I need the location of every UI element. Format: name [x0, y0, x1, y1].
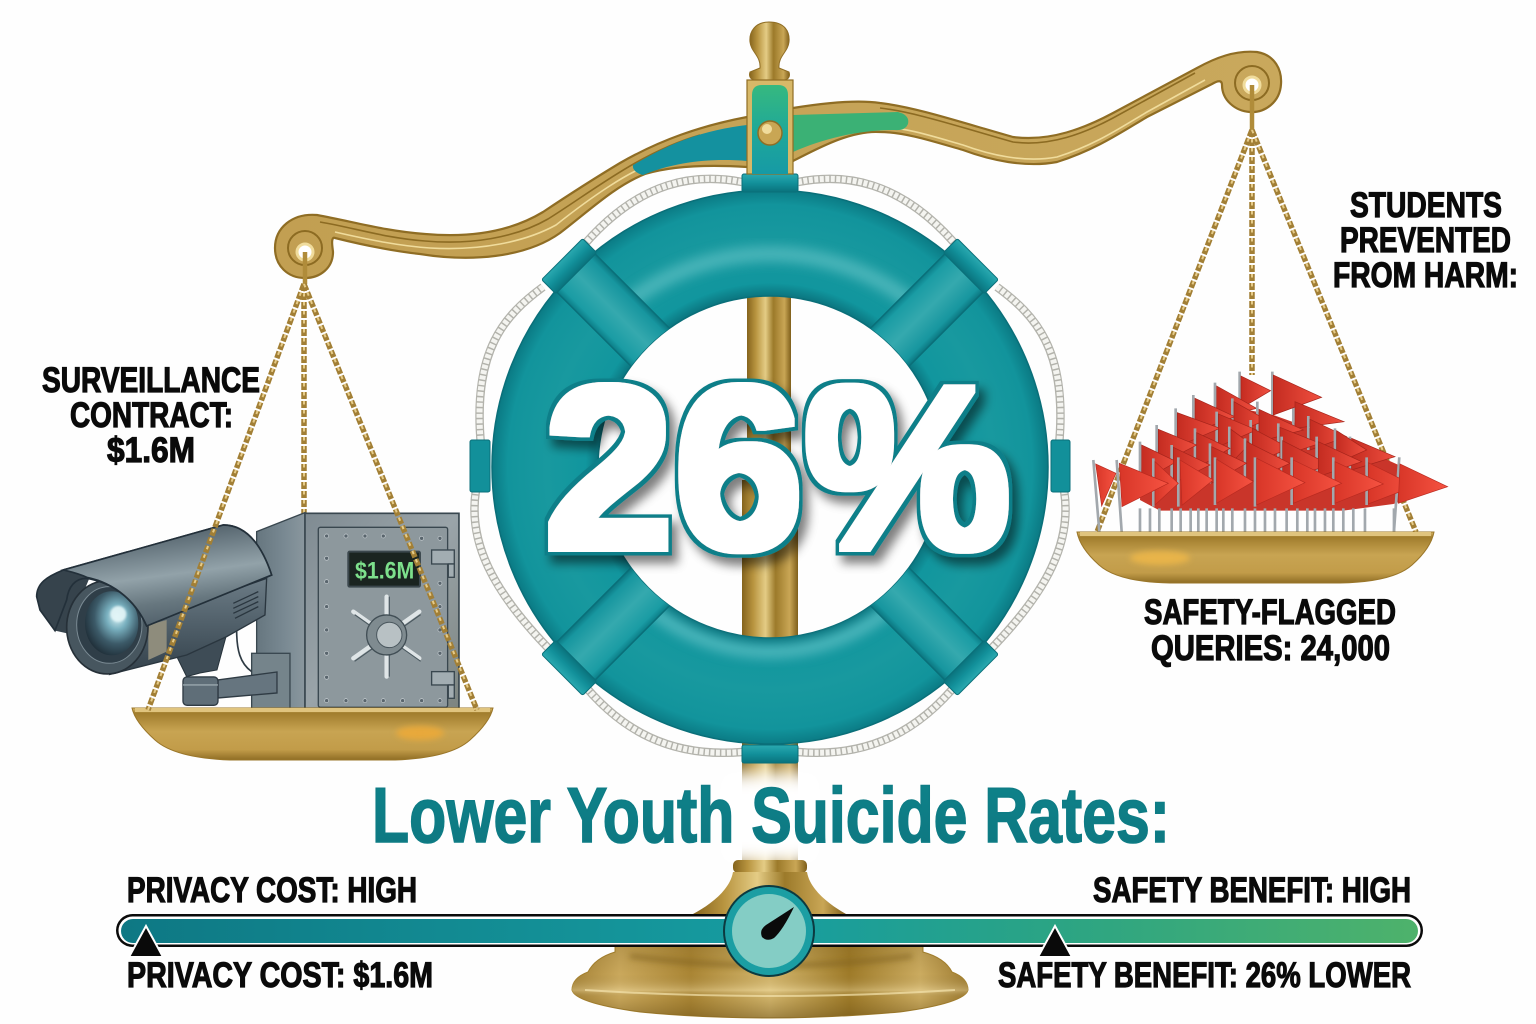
label: privacy cost high: PRIVACY COST: HIGH — [127, 871, 417, 910]
life ring — [470, 174, 1070, 763]
icon: surveillance camera — [37, 525, 272, 674]
icon: camera wall mount — [177, 630, 290, 708]
title: Lower Youth Suicide Rates: — [372, 771, 1170, 859]
base of the scale — [572, 860, 968, 1018]
scale post head with finial — [747, 22, 793, 174]
label: safety-flagged queries: SAFETY-FLAGGED — [1144, 593, 1396, 632]
label: surveillance contract: $1.6M — [107, 431, 195, 470]
label: safety benefit amount: SAFETY BENEFIT: 26% LOWER — [998, 956, 1411, 995]
marker: privacy cost — [129, 926, 163, 957]
big percentage: 26%: 26% — [544, 339, 1011, 598]
label: students prevented from harm — [1333, 186, 1518, 295]
scale beam — [275, 52, 1281, 278]
label: surveillance contract: CONTRACT: — [70, 396, 233, 435]
label: surveillance contract — [42, 361, 260, 470]
label: safety benefit high: SAFETY BENEFIT: HIGH — [1093, 871, 1411, 910]
right scale pan — [1077, 532, 1434, 583]
left hanging chains — [304, 252, 305, 515]
right hanging chains — [1097, 85, 1416, 532]
icon: vault safe: $1.6M — [355, 557, 414, 584]
label: privacy cost amount: PRIVACY COST: $1.6M — [127, 956, 433, 995]
gauge dial — [723, 885, 815, 977]
left counterweight: camera and safe — [37, 513, 459, 708]
marker: safety benefit — [1038, 926, 1072, 957]
label: students prevented from harm: STUDENTS — [1350, 186, 1502, 225]
rope around life ring — [474, 179, 1066, 753]
icon: vault safe — [257, 513, 459, 708]
left scale pan — [132, 708, 493, 760]
label: surveillance contract: SURVEILLANCE — [42, 361, 260, 400]
label: safety-flagged queries — [1144, 593, 1396, 668]
left front chains — [148, 284, 477, 710]
balance meter bar — [116, 914, 1423, 947]
scale center pole — [720, 280, 820, 864]
label: safety-flagged queries: QUERIES: 24,000 — [1151, 629, 1390, 668]
icon: red safety flags — [1093, 372, 1448, 532]
